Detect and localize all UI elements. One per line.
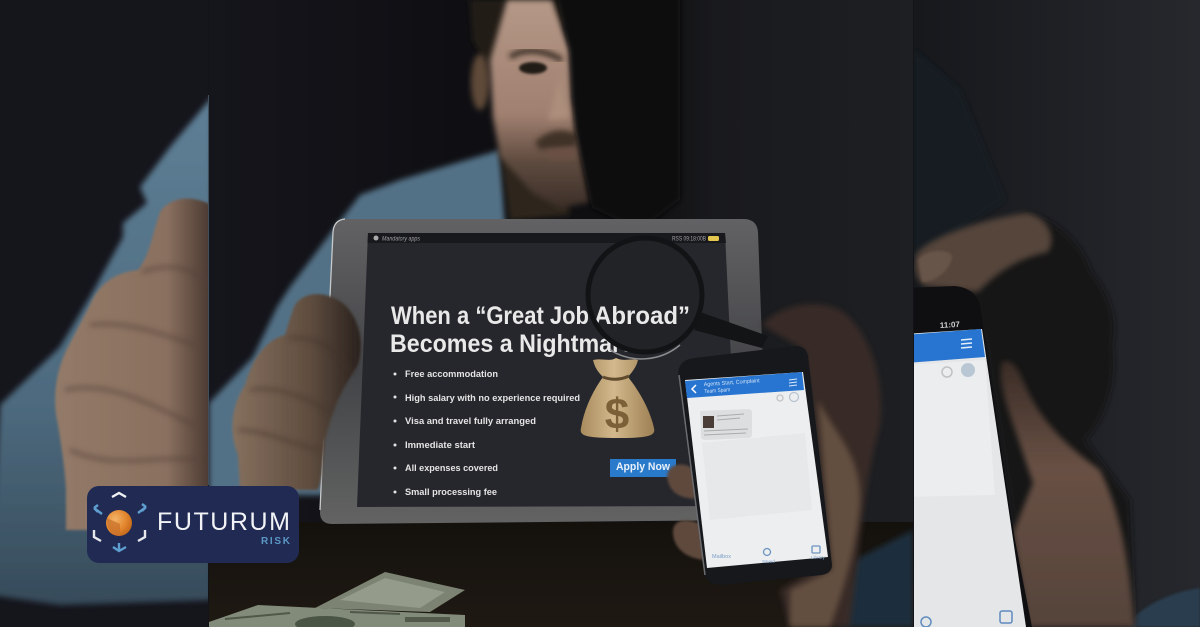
hair (470, 0, 563, 62)
phone bottom nav labels (712, 554, 825, 563)
offer bullet list (394, 369, 580, 498)
nose highlight and moustache (550, 92, 568, 120)
ear (471, 54, 489, 110)
table surface (209, 522, 913, 627)
lit thumb and palm (1001, 361, 1135, 627)
phone inner panel (702, 433, 812, 520)
collar shadow (1003, 202, 1004, 203)
phone icons (764, 392, 820, 556)
headline: When a “Great Job (391, 302, 589, 330)
man's face (470, 0, 680, 230)
magnifying glass (588, 238, 768, 359)
offer bullet list: Free accommodation (405, 369, 498, 380)
brow and eye (510, 51, 562, 60)
phone body (678, 346, 832, 585)
phone bottom nav labels: Library (811, 555, 826, 560)
shadow half (555, 0, 680, 230)
logo icon (94, 493, 146, 551)
phone header (905, 329, 985, 363)
panel: left photo crop (0, 96, 208, 609)
apply now button: Apply Now (616, 461, 670, 473)
tablet bezel (320, 219, 768, 524)
panel: right photo crop (905, 0, 1200, 627)
offer bullet list: Visa and travel fully arranged (405, 416, 536, 427)
logo: Futurum Risk (87, 486, 299, 563)
lower sleeve (1125, 588, 1200, 627)
phone (678, 346, 832, 585)
panel: centre photo (209, 0, 913, 627)
sleeve near right hand (840, 530, 913, 627)
status icons (921, 363, 1012, 627)
lit cheek (490, 0, 590, 208)
tablet (320, 219, 768, 524)
offer bullet list: High salary with no experience required (405, 393, 580, 404)
neck (500, 150, 570, 220)
phone content card (700, 409, 752, 440)
tablet status bar: RSS 09:18:00B (672, 236, 706, 242)
phone header: Team Spam (704, 387, 731, 395)
tablet status bar (368, 233, 726, 243)
panel seam (208, 95, 209, 485)
magnifying glass: Abroad” (594, 302, 690, 330)
offer bullet list: All expenses covered (405, 463, 498, 474)
icon: money bag (581, 358, 654, 439)
banknotes (209, 572, 465, 627)
middle hand holding tablet (232, 294, 361, 490)
shirt body left shoulder (209, 150, 505, 495)
offer bullet list: Immediate start (405, 440, 476, 451)
zoomed phone (905, 286, 1032, 627)
phone header: Agents Start, Complaint (704, 378, 760, 388)
logo subtitle: RISK (261, 536, 291, 547)
phone bottom nav labels: Mailbox (712, 554, 731, 560)
tablet screen (357, 233, 738, 507)
phone screen (905, 329, 1026, 627)
tablet status bar: Mandatory apps (382, 236, 420, 242)
phone status bar text: 11:07 (940, 320, 961, 330)
phone body (905, 286, 1032, 627)
phone screen (685, 372, 828, 568)
shirt sleeve left (0, 97, 212, 605)
headline: Becomes a Nightmare (390, 330, 634, 358)
index finger (915, 213, 1051, 292)
right hand behind phone (762, 304, 881, 627)
inner panel (905, 360, 995, 497)
hamburger icon (961, 339, 972, 348)
phone bottom nav labels: Saved (762, 559, 775, 564)
phone header (685, 372, 804, 398)
logo background (87, 486, 299, 563)
icon: money bag: $ (605, 390, 629, 439)
handle (694, 312, 768, 348)
finger on phone left (667, 465, 708, 560)
offer bullet list: Small processing fee (405, 487, 497, 498)
headline (391, 306, 628, 357)
logo wordmark: FUTURUM (157, 508, 290, 536)
large dark hand (920, 213, 1135, 627)
apply now button (610, 459, 676, 477)
left fist (55, 199, 215, 530)
